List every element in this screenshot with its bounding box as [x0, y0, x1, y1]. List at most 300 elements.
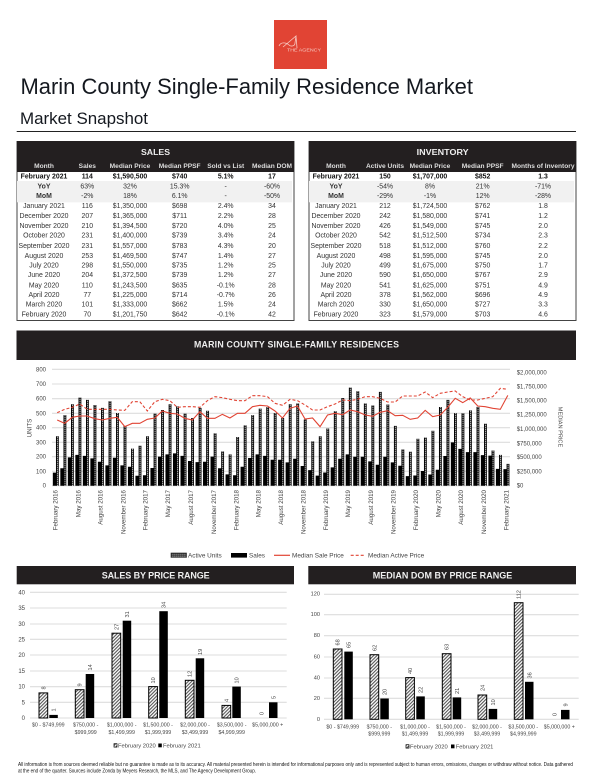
- inventory rows: $734: [475, 232, 491, 240]
- sales rows: 116: [82, 203, 93, 210]
- inventory rows: November 2020: [311, 223, 361, 230]
- data labels: 24: [480, 685, 486, 691]
- y axis labels: 15: [18, 669, 26, 675]
- sales rows: 25: [268, 223, 276, 230]
- logo: The Agency: [274, 20, 327, 69]
- inventory rows: 4.9: [538, 282, 548, 290]
- right axis labels: $1,500,000: [517, 398, 547, 404]
- y axis labels: 30: [18, 622, 26, 628]
- inventory rows: 2.0: [538, 253, 548, 260]
- x axis month labels: November 2020: [481, 489, 488, 534]
- data labels: 65: [346, 642, 352, 648]
- data labels: 8: [42, 686, 48, 690]
- inventory rows: $1,595,000: [413, 253, 447, 260]
- sales rows: $711: [172, 213, 187, 220]
- data labels: 36: [527, 672, 533, 678]
- sales rows: $1,550,000: [113, 262, 147, 270]
- inventory rows: October 2020: [315, 232, 357, 240]
- right axis labels: [517, 370, 547, 490]
- inventory rows: 1.8: [538, 203, 548, 210]
- bars: February 2020: [39, 633, 231, 718]
- sales rows: 101: [82, 302, 93, 308]
- logo: The Agency: THE AGENCY: [287, 48, 322, 54]
- inventory rows: $1,650,000: [413, 302, 447, 308]
- inventory rows: February 2020: [314, 312, 359, 318]
- category labels: $999,999: [75, 730, 97, 736]
- x axis month labels: November 2017: [211, 489, 218, 534]
- category labels: $0 - $749,999: [32, 722, 65, 728]
- sales column headers: Median PPSF: [159, 163, 201, 170]
- category labels: $1,999,999: [438, 732, 464, 738]
- right axis title: MEDIAN PRICE: [556, 407, 562, 447]
- inventory rows: $745: [475, 223, 491, 230]
- data labels: 20: [382, 689, 388, 695]
- category labels: $4,999,999: [218, 730, 245, 736]
- sales rows: 26: [268, 292, 276, 299]
- inventory rows: $760: [475, 243, 491, 250]
- sales rows: 4.3%: [218, 243, 234, 250]
- sales rows: $1,590,500: [113, 174, 147, 180]
- sales rows: $739: [172, 272, 188, 279]
- data labels: 21: [455, 688, 461, 694]
- inventory rows: $1,707,000: [413, 174, 447, 180]
- inventory rows: $751: [475, 282, 491, 290]
- sales rows: 28: [268, 213, 276, 220]
- inventory rows: $852: [475, 174, 491, 180]
- sales rows: 27: [268, 253, 276, 260]
- sales rows: 63%: [80, 184, 94, 190]
- data labels: 31: [125, 611, 131, 618]
- inventory rows: May 2020: [321, 282, 351, 290]
- sales rows: 34: [268, 203, 276, 210]
- legend: February 2021: [456, 744, 493, 750]
- sales rows: March 2020: [26, 302, 62, 308]
- data labels: 10: [491, 699, 497, 706]
- inventory rows: $750: [475, 262, 491, 270]
- panel: sales table: [17, 141, 294, 320]
- inventory rows: July 2020: [321, 262, 351, 270]
- category labels: $750,000 -: [367, 724, 392, 730]
- category labels: $3,499,999: [474, 732, 500, 738]
- x axis month labels: November 2016: [120, 489, 127, 534]
- right axis labels: $1,000,000: [517, 427, 547, 433]
- title: Marin County Single-Family Residence Market: [20, 74, 473, 99]
- x axis month labels: August 2020: [458, 489, 465, 525]
- inventory rows: 1.2: [538, 213, 548, 220]
- inventory rows: 2.9: [538, 272, 548, 279]
- inventory rows: $696: [475, 292, 491, 299]
- right axis labels: $1,250,000: [517, 413, 547, 419]
- inventory rows: 518: [379, 243, 391, 250]
- inventory rows: $703: [475, 312, 491, 318]
- x axis month labels: August 2017: [188, 489, 195, 525]
- inventory rows: 2.3: [538, 232, 548, 240]
- y axis labels: 60: [314, 654, 320, 660]
- sales rows: 4.0%: [218, 223, 234, 230]
- x axis month labels: November 2018: [300, 489, 307, 534]
- inventory rows: February 2021: [313, 174, 360, 180]
- chart legend: Active Units: [188, 552, 222, 559]
- panel: sales by price range: [17, 566, 294, 750]
- heading: median DOM by price range: MEDIAN DOM BY PRICE RANGE: [373, 570, 512, 580]
- inventory rows: March 2020: [318, 302, 354, 308]
- inventory column headers: Median PPSF: [462, 163, 504, 170]
- inventory rows: $1,579,000: [413, 312, 447, 318]
- sales rows: November 2020: [19, 223, 69, 230]
- inventory rows: 4.6: [538, 312, 548, 318]
- category labels: $5,000,000 +: [252, 722, 283, 728]
- chart: Marin County units and median price: [26, 368, 562, 559]
- inventory rows: $1,675,000: [413, 262, 447, 270]
- sales rows: 253: [82, 253, 93, 260]
- panel: main chart header: MARIN COUNTY SINGLE-FAMILY RESIDENCES: [194, 340, 399, 350]
- inventory rows: 541: [379, 282, 391, 290]
- sales rows: 25: [268, 262, 276, 270]
- sales rows: -60%: [264, 184, 280, 190]
- y axis labels: 25: [18, 637, 26, 643]
- inventory rows: $1,562,000: [413, 292, 447, 299]
- category labels: $3,500,000 -: [217, 722, 247, 728]
- inventory rows: -1%: [424, 193, 436, 200]
- sales rows: December 2020: [19, 213, 69, 220]
- inventory rows: 12%: [476, 193, 490, 200]
- right axis labels: $2,000,000: [517, 370, 547, 376]
- sales rows: -50%: [264, 193, 280, 200]
- legend: [406, 744, 493, 750]
- panel: main chart header: [16, 330, 576, 360]
- inventory rows: 242: [379, 213, 391, 220]
- category labels: [326, 724, 575, 738]
- inventory rows: $1,650,000: [413, 272, 447, 279]
- sales rows: 32%: [123, 184, 137, 190]
- footer disclaimer: All information is from sources deemed reliable but no guarantee is made as to its accuracy. All material presented herein is intended for informational purposes only and is represented subject to human errors, omissions, changes or withdraw without notice. Data gathered: [18, 762, 573, 768]
- inventory column headers: Median Price: [410, 163, 451, 170]
- sales rows: 3.4%: [218, 232, 234, 240]
- inventory rows: December 2020: [311, 213, 361, 220]
- sales rows: 17: [268, 174, 276, 180]
- sales rows: 231: [82, 243, 93, 250]
- sales rows: $1,400,000: [113, 232, 147, 240]
- data labels: [336, 590, 569, 716]
- sales rows: $747: [172, 253, 188, 260]
- sales rows: 1.2%: [218, 272, 234, 279]
- category labels: $1,000,000 -: [400, 724, 430, 730]
- y axis labels: 40: [314, 676, 320, 682]
- legend: February 2020: [410, 744, 448, 750]
- left axis labels: 700: [36, 382, 47, 388]
- sales rows: YoY: [38, 184, 51, 190]
- left axis labels: 800: [36, 368, 47, 374]
- sales rows: $662: [172, 302, 188, 308]
- sales rows: -: [225, 184, 227, 190]
- sales rows: January 2021: [23, 203, 65, 210]
- sales column headers: Month: [34, 163, 54, 170]
- inventory rows: 1.3: [538, 174, 548, 180]
- inventory column headers: [326, 163, 575, 170]
- legend: February 2021: [163, 744, 201, 750]
- category labels: $750,000 -: [73, 722, 99, 728]
- inventory rows: 590: [379, 272, 391, 279]
- data labels: 62: [372, 645, 378, 651]
- x axis month labels: February 2016: [52, 489, 60, 530]
- category labels: $2,000,000 -: [472, 724, 502, 730]
- sales rows: $714: [172, 292, 188, 299]
- sales rows: $783: [172, 243, 188, 250]
- legend: February 2020: [118, 744, 156, 750]
- inventory rows: $1,512,000: [413, 243, 447, 250]
- sales rows: 28: [268, 282, 276, 290]
- panel: median DOM by price range: [308, 566, 579, 750]
- heading: sales: SALES: [141, 147, 170, 157]
- sales rows: 18%: [123, 193, 137, 200]
- category labels: $1,499,999: [108, 730, 135, 736]
- inventory rows: $1,580,000: [413, 213, 447, 220]
- inventory rows: 4.9: [538, 292, 548, 299]
- category labels: $0 - $749,999: [326, 724, 359, 730]
- inventory rows: August 2020: [317, 253, 356, 260]
- sales rows: 114: [82, 174, 93, 180]
- bars: February 2020: [333, 603, 523, 719]
- y axis labels: 35: [18, 606, 26, 612]
- bars: February 2021: [344, 652, 570, 719]
- footer disclaimer: at the end of the quarter. Sources include Zonda by Meyers Research, the MLS, and The Agency Development Group.: [18, 769, 256, 775]
- y axis labels: [311, 592, 320, 723]
- x axis month labels: February 2021: [504, 489, 511, 530]
- right axis labels: $0: [517, 484, 524, 490]
- inventory rows: $741: [475, 213, 491, 220]
- inventory rows: 21%: [476, 184, 490, 190]
- inventory rows: 2.2: [538, 243, 548, 250]
- sales rows: -: [225, 193, 227, 200]
- category labels: $5,000,000 +: [544, 724, 575, 730]
- sales rows: October 2020: [23, 232, 65, 240]
- category labels: $3,500,000 -: [508, 724, 538, 730]
- y axis labels: 80: [314, 633, 320, 639]
- sales rows: 204: [82, 272, 93, 279]
- left axis title: UNITS: [26, 419, 34, 437]
- footer disclaimer: [18, 762, 573, 775]
- x axis month labels: [52, 489, 511, 534]
- category labels: $2,000,000 -: [180, 722, 210, 728]
- sales column headers: Median DOM: [252, 163, 292, 170]
- data labels: 0: [260, 712, 266, 715]
- sales rows: 24: [268, 232, 276, 240]
- inventory rows: MoM: [328, 193, 344, 200]
- sales rows: $698: [172, 203, 188, 210]
- line: median sale price: [57, 395, 508, 427]
- right axis labels: $500,000: [517, 455, 542, 461]
- left axis labels: 600: [36, 397, 47, 403]
- data labels: 34: [162, 602, 168, 608]
- data labels: 0: [552, 713, 558, 716]
- data labels: 40: [408, 668, 414, 674]
- sales column headers: [34, 163, 292, 170]
- x axis month labels: February 2020: [413, 489, 420, 530]
- y axis labels: [18, 590, 26, 722]
- chart legend: Median Sale Price: [292, 552, 344, 559]
- category labels: $1,500,000 -: [143, 722, 173, 728]
- sales rows: 110: [82, 282, 93, 290]
- sales rows: -2%: [81, 193, 93, 200]
- sales rows: 210: [82, 223, 93, 230]
- data labels: 19: [198, 649, 204, 655]
- category labels: $1,000,000 -: [107, 722, 137, 728]
- inventory rows: January 2021: [315, 203, 357, 210]
- sales rows: [19, 174, 280, 318]
- sales rows: 27: [268, 272, 276, 279]
- bars: active units: [57, 388, 508, 486]
- x axis month labels: August 2018: [278, 489, 285, 525]
- sales rows: -0.1%: [217, 312, 235, 318]
- left axis labels: 500: [36, 411, 47, 417]
- inventory rows: $762: [475, 203, 491, 210]
- sales rows: 2.4%: [218, 203, 234, 210]
- left axis labels: 100: [36, 469, 47, 475]
- x axis month labels: August 2019: [368, 489, 375, 525]
- sales rows: February 2021: [21, 174, 68, 180]
- subtitle: Market Snapshot: Market Snapshot: [20, 109, 148, 128]
- inventory rows: $727: [475, 302, 491, 308]
- sales rows: 1.5%: [218, 302, 234, 308]
- sales rows: 20: [268, 243, 276, 250]
- panel: inventory table: [309, 141, 576, 320]
- sales rows: 298: [82, 262, 93, 270]
- inventory rows: 2.0: [538, 223, 548, 230]
- sales rows: 1.4%: [218, 253, 234, 260]
- inventory rows: April 2020: [320, 292, 352, 299]
- x axis month labels: February 2017: [142, 489, 149, 530]
- left axis labels: [36, 368, 47, 490]
- data labels: 22: [419, 687, 425, 693]
- heading: inventory: INVENTORY: [417, 147, 469, 157]
- sales rows: $1,201,750: [113, 312, 147, 318]
- inventory rows: 426: [379, 223, 391, 230]
- chart legend: Sales: [249, 552, 265, 559]
- data labels: 112: [517, 590, 523, 599]
- category labels: $1,499,999: [402, 732, 428, 738]
- sales rows: $739: [172, 232, 188, 240]
- sales rows: $1,372,500: [113, 272, 147, 279]
- sales rows: 6.1%: [172, 193, 188, 200]
- inventory rows: $745: [475, 253, 491, 260]
- inventory rows: [311, 174, 551, 318]
- sales rows: -0.1%: [217, 282, 235, 290]
- inventory rows: September 2020: [311, 243, 362, 250]
- heading: sales by price range: [17, 566, 294, 584]
- data labels: 10: [151, 677, 157, 684]
- inventory rows: -71%: [535, 184, 551, 190]
- bars: February 2021: [49, 611, 277, 718]
- x axis month labels: May 2020: [436, 489, 443, 517]
- chart legend: [171, 552, 425, 559]
- inventory rows: 542: [379, 232, 391, 240]
- inventory rows: -29%: [377, 193, 393, 200]
- category labels: $4,999,999: [510, 732, 537, 738]
- inventory rows: 1.7: [538, 262, 548, 270]
- sales rows: 77: [83, 292, 91, 299]
- category labels: $1,999,999: [145, 730, 171, 736]
- sales rows: MoM: [36, 193, 52, 200]
- sales rows: 42: [268, 312, 276, 318]
- category labels: [32, 722, 283, 736]
- data labels: 1: [52, 708, 58, 712]
- y axis labels: 40: [18, 590, 26, 596]
- y axis labels: 0: [22, 716, 26, 722]
- inventory column headers: Months of Inventory: [511, 163, 575, 170]
- data labels: 9: [563, 703, 569, 706]
- x axis month labels: August 2016: [98, 489, 105, 525]
- sales rows: $1,333,000: [113, 302, 147, 308]
- sales column headers: Median Price: [110, 163, 151, 170]
- sales rows: -0.7%: [217, 292, 235, 299]
- inventory rows: 499: [379, 262, 391, 270]
- sales rows: 15.3%: [170, 184, 189, 190]
- y axis labels: 20: [18, 653, 26, 659]
- data labels: 68: [336, 639, 342, 646]
- category labels: $999,999: [368, 732, 390, 738]
- inventory rows: 8%: [425, 184, 435, 190]
- data labels: 14: [88, 664, 94, 670]
- sales rows: August 2020: [25, 253, 64, 260]
- left axis labels: 300: [36, 440, 47, 446]
- category labels: $3,499,999: [182, 730, 208, 736]
- category labels: $1,500,000 -: [436, 724, 466, 730]
- sales rows: 1.2%: [218, 262, 234, 270]
- sales rows: $1,350,000: [113, 203, 147, 210]
- heading: sales by price range: SALES BY PRICE RANGE: [102, 570, 210, 580]
- right axis labels: $1,750,000: [517, 385, 547, 391]
- heading: median DOM by price range: [308, 566, 576, 584]
- y axis labels: 10: [18, 685, 26, 691]
- sales rows: 24: [268, 302, 276, 308]
- sales rows: $1,243,500: [113, 282, 147, 290]
- inventory rows: YoY: [330, 184, 343, 190]
- sales rows: July 2020: [29, 262, 59, 270]
- inventory rows: -28%: [535, 193, 551, 200]
- x axis month labels: November 2019: [391, 489, 398, 534]
- right axis labels: $750,000: [517, 441, 542, 447]
- sales rows: February 2020: [22, 312, 67, 318]
- x axis month labels: May 2017: [165, 489, 172, 517]
- inventory rows: 498: [379, 253, 391, 260]
- chart legend: Median Active Price: [368, 552, 425, 559]
- sales rows: 70: [83, 312, 91, 318]
- inventory rows: 330: [379, 302, 391, 308]
- left axis labels: 0: [43, 484, 47, 490]
- data labels: 27: [114, 624, 120, 630]
- sales column headers: Sales: [79, 163, 96, 170]
- inventory column headers: Active Units: [366, 163, 404, 170]
- sales rows: June 2020: [28, 272, 60, 279]
- sales rows: $1,225,000: [113, 292, 147, 299]
- x axis month labels: February 2018: [233, 489, 240, 530]
- sales rows: 207: [82, 213, 93, 220]
- sales rows: September 2020: [19, 243, 70, 250]
- inventory rows: -54%: [377, 184, 393, 190]
- x axis month labels: May 2019: [345, 489, 352, 517]
- y axis labels: 120: [311, 592, 320, 598]
- line: median active price: [57, 388, 508, 413]
- legend: [114, 744, 201, 750]
- data labels: 63: [445, 644, 451, 650]
- inventory rows: 212: [379, 203, 391, 210]
- data labels: 10: [235, 677, 241, 684]
- sales rows: $1,469,500: [113, 253, 147, 260]
- y axis labels: 100: [311, 612, 320, 618]
- inventory rows: $767: [475, 272, 491, 279]
- sales rows: May 2020: [29, 282, 59, 290]
- y axis labels: 5: [22, 700, 26, 706]
